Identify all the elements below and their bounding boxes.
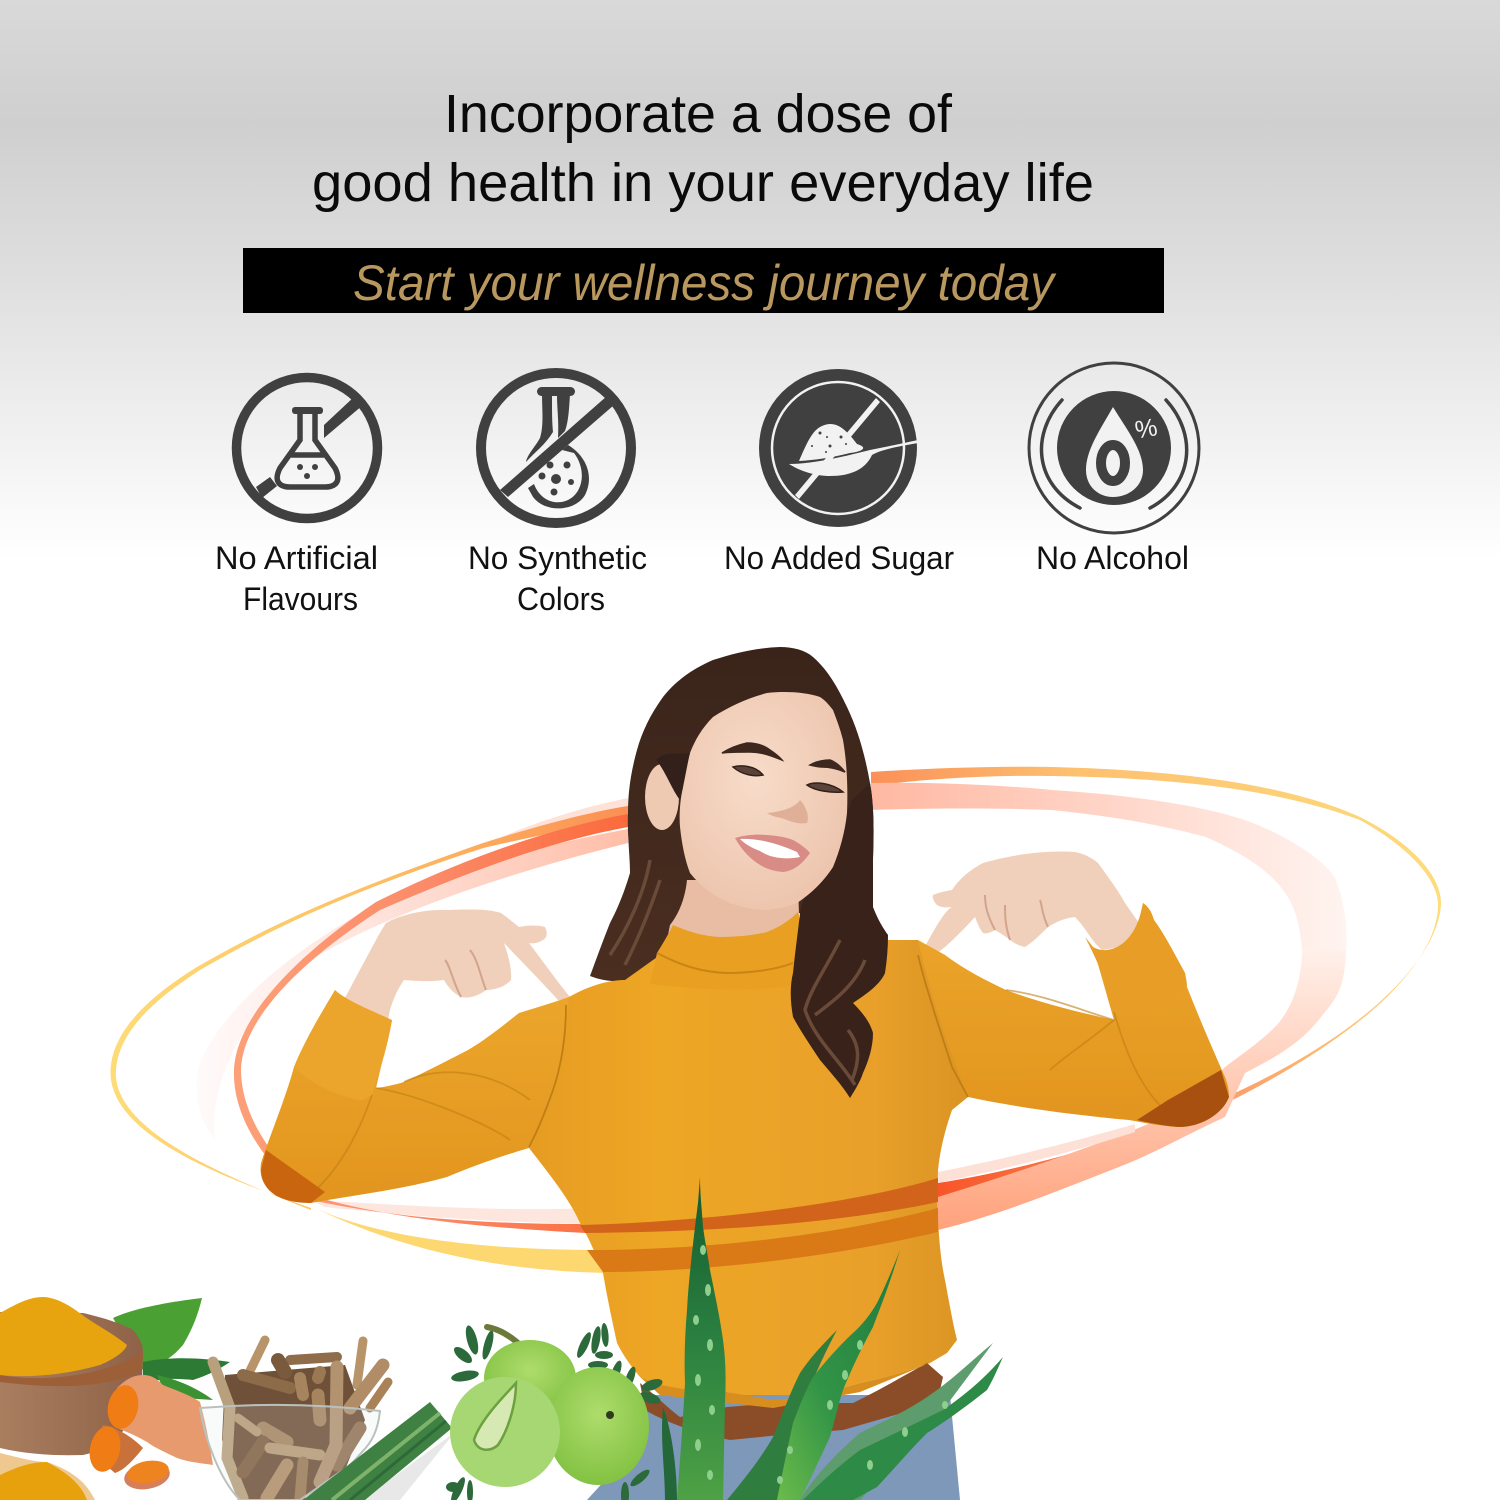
torso	[529, 940, 968, 1400]
hair right lock	[791, 783, 888, 1098]
sleeve left	[261, 990, 600, 1203]
label: no synthetic colors: No Synthetic	[468, 540, 647, 576]
root mass	[222, 1365, 365, 1500]
ear	[645, 764, 679, 830]
icon: no artificial flavours	[236, 378, 378, 518]
food: amla fruits and leaves	[446, 1323, 664, 1500]
title: good health in your everyday life	[312, 153, 1094, 213]
glass bowl	[200, 1405, 380, 1500]
food: glass with dried roots	[200, 1340, 388, 1500]
food: aloe vera	[662, 1177, 1003, 1500]
aloe spots	[693, 1245, 948, 1484]
collar	[650, 912, 802, 989]
cut amla	[450, 1377, 560, 1487]
icon: no added sugar	[759, 369, 918, 527]
hair shadow by ear	[656, 753, 690, 800]
turmeric root	[117, 1375, 213, 1465]
hair back	[590, 647, 874, 981]
sweater hem over belt	[640, 1363, 930, 1408]
food: turmeric bowl	[0, 1297, 230, 1500]
finger shadows	[445, 895, 1048, 997]
belt	[640, 1363, 943, 1440]
wooden bowl	[0, 1312, 143, 1455]
aloe leaf center	[677, 1177, 726, 1500]
aloe leaf back-right	[800, 1343, 993, 1500]
sweater seams and folds	[310, 955, 1170, 1195]
title: Incorporate a dose of	[444, 84, 953, 144]
dark ribbon bands over the sweater	[261, 1070, 1229, 1272]
sleeve right	[880, 903, 1229, 1127]
turmeric powder mound	[0, 1297, 127, 1376]
right amla	[547, 1367, 649, 1485]
aloe leaf middle	[777, 1250, 900, 1500]
bowl rim	[0, 1352, 143, 1386]
jeans	[587, 1395, 960, 1500]
leaves	[113, 1298, 202, 1370]
label: no added sugar: No Added Sugar	[724, 540, 954, 576]
label: no alcohol: No Alcohol	[1036, 540, 1189, 576]
hand left	[340, 909, 570, 1030]
banner: start your wellness journey today	[243, 248, 1164, 313]
hand right	[918, 852, 1139, 963]
food: drumstick	[303, 1402, 455, 1500]
icon: no alcohol	[1029, 363, 1199, 533]
aloe leaf back-left	[727, 1330, 837, 1500]
woman pointing at herself	[261, 647, 1229, 1500]
face	[680, 692, 847, 910]
back amla	[484, 1340, 576, 1416]
eyes	[733, 766, 843, 792]
label: no synthetic colors: Colors	[517, 581, 605, 617]
label: no artificial flavours: No Artificial	[215, 540, 378, 576]
fern leaves	[446, 1323, 664, 1500]
cuffs	[294, 990, 392, 1100]
small back leaf	[662, 1407, 677, 1500]
aloe leaf right	[803, 1357, 1003, 1500]
background gradient	[0, 0, 1500, 560]
icon: no synthetic colors	[481, 373, 631, 523]
nose	[767, 800, 808, 823]
banner: start your wellness journey today: Start your wellness journey today	[353, 255, 1057, 311]
icon: no alcohol: %	[1133, 413, 1160, 445]
label: no artificial flavours: Flavours	[243, 581, 358, 617]
loose powder on wood	[0, 1453, 95, 1500]
title	[312, 84, 1094, 213]
label: no artificial flavours	[215, 540, 378, 617]
smile	[735, 835, 810, 872]
hair highlights	[610, 860, 865, 1085]
label: no synthetic colors	[468, 540, 647, 617]
neck	[665, 880, 800, 950]
brows	[722, 743, 845, 772]
stem	[487, 1327, 542, 1372]
orbit ribbons behind the woman	[111, 767, 1441, 1273]
